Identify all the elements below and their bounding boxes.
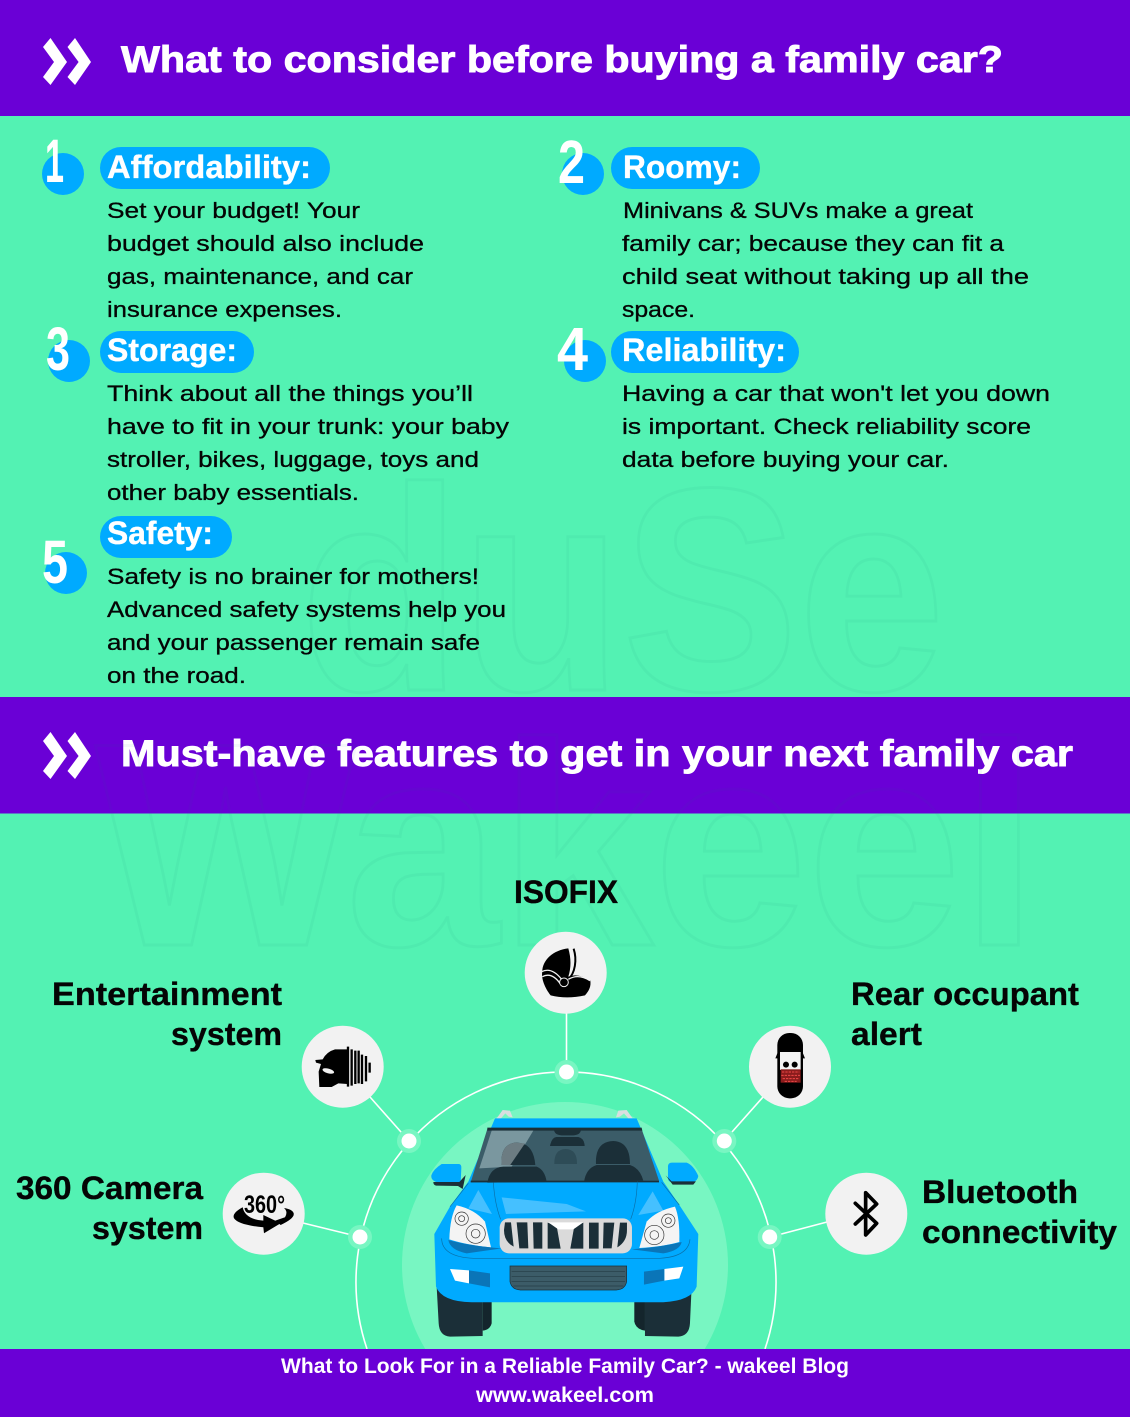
footer band — [0, 1349, 1130, 1417]
footer source title: What to Look For in a Reliable Family Car? - wakeel Blog — [281, 1355, 849, 1378]
halo behind car — [402, 1102, 728, 1349]
connector arc and nodes — [303, 1013, 827, 1349]
icon: 360 camera — [223, 1173, 305, 1255]
text: storage: other baby essentials. — [107, 480, 359, 505]
number badge 4 — [557, 315, 606, 383]
item 4: reliability — [557, 315, 1050, 472]
body — [434, 1118, 698, 1302]
pill heading: storage: Storage: — [107, 332, 237, 368]
text: affordability: budget should also include — [107, 231, 424, 256]
text: storage: Think about all the things you’ll — [107, 381, 473, 406]
number badge 3: 3 — [46, 315, 70, 383]
feature label: 360 camera system: system — [92, 1210, 203, 1246]
item 5: safety — [42, 515, 506, 688]
header band: what to consider — [0, 0, 1130, 116]
title: must-have features: Must-have features to get in your next family car — [121, 733, 1073, 774]
text: safety: and your passenger remain safe — [107, 630, 480, 655]
feature label: entertainment system: system — [171, 1016, 282, 1052]
watermark: duSe — [300, 428, 945, 752]
icon: bluetooth — [825, 1173, 907, 1255]
icon: entertainment car with sound wave — [302, 1026, 384, 1108]
feature label: entertainment system: Entertainment — [52, 976, 282, 1012]
text: storage: have to fit in your trunk: your baby — [107, 414, 510, 439]
text: reliability — [622, 381, 1050, 472]
headlights — [449, 1205, 491, 1247]
feature label: entertainment system — [52, 976, 282, 1052]
footer url: www.wakeel.com — [475, 1384, 654, 1407]
feature label: rear occupant alert: alert — [851, 1016, 922, 1052]
title: what to consider: What to consider before buying a family car? — [121, 39, 1003, 80]
text: affordability: gas, maintenance, and car — [107, 264, 414, 289]
text: roomy: space. — [622, 297, 695, 322]
text: roomy: Minivans & SUVs make a great — [623, 198, 974, 223]
text: affordability: Set your budget! Your — [107, 198, 361, 223]
icon: double chevron — [43, 38, 91, 85]
windshield — [471, 1129, 659, 1182]
wheels — [437, 1287, 692, 1337]
header band: must-have features — [0, 697, 1130, 814]
hood — [450, 1182, 679, 1219]
feature label: bluetooth connectivity — [922, 1174, 1117, 1250]
feature label: 360 camera system: 360 Camera — [16, 1170, 204, 1206]
text: affordability — [107, 198, 424, 322]
watermark — [95, 428, 1038, 1007]
fog lamps — [450, 1269, 469, 1283]
text: safety: on the road. — [107, 663, 246, 688]
pill heading: affordability: Affordability: — [107, 149, 311, 185]
feature label: bluetooth connectivity: Bluetooth — [922, 1174, 1078, 1210]
pill heading: roomy — [611, 147, 760, 189]
pill heading: safety: Safety: — [107, 515, 213, 551]
feature label: rear occupant alert — [851, 976, 1079, 1052]
number badge 5: 5 — [42, 528, 68, 596]
text: roomy: child seat without taking up all the — [622, 264, 1029, 289]
car illustration — [431, 1110, 698, 1337]
text: affordability: insurance expenses. — [107, 297, 342, 322]
watermark: Wakeel — [95, 683, 1038, 1007]
lower intake — [510, 1266, 627, 1290]
text: safety: Advanced safety systems help you — [107, 597, 506, 622]
grille — [500, 1218, 632, 1253]
text: reliability: data before buying your car. — [622, 447, 949, 472]
item 3: storage — [46, 315, 510, 505]
text: safety — [107, 564, 506, 688]
roof rails — [497, 1110, 633, 1118]
feature label: isofix: ISOFIX — [514, 874, 618, 910]
text: storage — [107, 381, 510, 505]
text: reliability: Having a car that won't let you down — [622, 381, 1050, 406]
mirrors — [431, 1164, 461, 1183]
text: roomy — [622, 198, 1029, 322]
number badge 2: 2 — [558, 128, 585, 196]
seats and mirror — [487, 1129, 643, 1183]
text: roomy: family car; because they can fit a — [622, 231, 1005, 256]
icon: double chevron — [43, 732, 91, 779]
number badge 1: 1 — [45, 127, 64, 195]
icon: 360 camera: 360° — [244, 1191, 285, 1219]
text: storage: stroller, bikes, luggage, toys and — [107, 447, 479, 472]
icon: rear occupant alert — [749, 1026, 831, 1108]
text: safety: Safety is no brainer for mothers! — [107, 564, 479, 589]
pill heading: safety — [100, 515, 232, 558]
feature label: 360 camera system — [16, 1170, 204, 1246]
feature label: rear occupant alert: Rear occupant — [851, 976, 1079, 1012]
item 2: roomy — [558, 128, 1029, 322]
text: reliability: is important. Check reliability score — [622, 414, 1031, 439]
number badge 4: 4 — [557, 315, 588, 383]
pill heading: roomy: Roomy: — [623, 149, 741, 185]
item 1: affordability — [42, 127, 424, 322]
pill heading: reliability: Reliability: — [622, 332, 786, 368]
icon: isofix child seat — [525, 932, 607, 1014]
feature label: bluetooth connectivity: connectivity — [922, 1214, 1117, 1250]
bumper shadow — [448, 1240, 682, 1253]
